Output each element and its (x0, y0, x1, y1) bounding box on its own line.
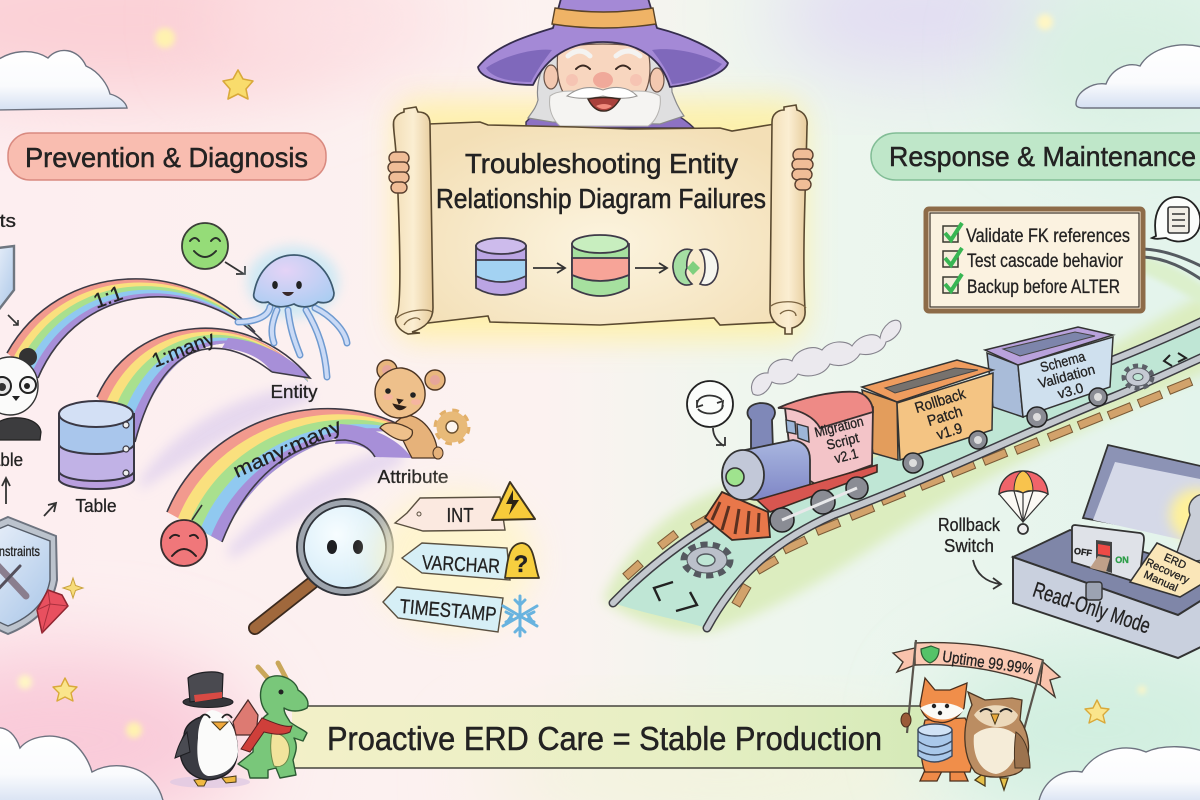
tag: INT: INT (446, 505, 474, 527)
train: carriage Schema Validation (985, 327, 1113, 427)
icon: snowflake (503, 596, 537, 636)
icon: green and red table stack (572, 235, 629, 296)
rollback switch panel (1072, 525, 1144, 583)
tag: VARCHAR: VARCHAR (421, 552, 500, 578)
icon: question mark (505, 543, 539, 578)
track bed (613, 320, 1200, 628)
magnifying glass (255, 499, 393, 628)
green hill under the railway (603, 255, 1200, 633)
check item: Backup before ALTER: Backup before ALTER (967, 277, 1120, 298)
rainbow: many to many relationship (167, 409, 412, 542)
label: Table: Table (76, 496, 116, 516)
cow catcher (705, 492, 770, 540)
icon: ruby (37, 590, 68, 633)
label: Rollback Patch v1.9: v1.9 (935, 420, 964, 444)
cloud: bottom right (1038, 747, 1200, 800)
rainbow: 1 to 1 relationship (7, 279, 262, 378)
recovery manual (1130, 543, 1200, 598)
label: Schema Validation v3.0: Schema (1038, 348, 1087, 375)
arrow: switch label to toolbox (973, 560, 1001, 589)
parchment scroll (388, 105, 813, 334)
label: Rollback Patch v1.9 (913, 385, 977, 448)
left roll (393, 107, 433, 334)
toolbox interior (1013, 530, 1200, 615)
yellow wash behind the tags (375, 490, 535, 630)
icon: gear, attribute (437, 412, 467, 442)
label: Entity: Entity (270, 382, 318, 402)
icon: warning bolt (492, 482, 535, 520)
tag: TIMESTAMP: TIMESTAMP (399, 596, 497, 626)
icon: repaired link (673, 249, 718, 285)
recovery manual: ERD (1162, 552, 1188, 572)
icon: cycle badge (687, 381, 733, 427)
scroll title: Relationship Diagram Failures (436, 183, 766, 214)
train: carriage Rollback Patch (862, 360, 993, 473)
star: bottom right (1085, 700, 1109, 723)
recovery manual: Recovery (1144, 557, 1191, 587)
label: Read-Only Mode: Read-Only Mode (1030, 577, 1154, 638)
arrow: shield to panda (8, 315, 18, 325)
code brackets, left (654, 582, 697, 611)
icon: blue and purple table stack (476, 238, 526, 295)
gear on the track, right (1124, 366, 1152, 388)
left hand (388, 152, 409, 193)
rails (613, 249, 1200, 628)
label: 1:1: 1:1 (91, 282, 126, 313)
scroll title (436, 148, 766, 214)
toolbox (1013, 445, 1200, 658)
wizard ears (544, 65, 664, 92)
green dragon (233, 663, 308, 778)
cloud: top left (0, 50, 127, 110)
rainbow: 1 to many relationship (97, 327, 310, 442)
wheels (770, 477, 868, 532)
code brackets, right (1164, 353, 1186, 366)
fox holding a database (901, 678, 973, 781)
wizard hat (478, 0, 728, 87)
recovery manual: Manual (1142, 569, 1180, 594)
check item: Backup before ALTER (943, 274, 1120, 298)
check item: Test cascade behavior: Test cascade behavior (967, 251, 1124, 272)
arrow: smiley to jellyfish (225, 262, 245, 274)
heading pill: Prevention and Diagnosis: Prevention & Diagnosis (25, 142, 308, 173)
heading pill: Prevention and Diagnosis (8, 133, 326, 180)
cloud: top right (1076, 45, 1200, 108)
shield: entry constraints, top left (0, 211, 16, 315)
label: Attribute: Attribute (378, 467, 448, 487)
rollback switch panel: OFF (1073, 546, 1093, 558)
right roll (770, 105, 807, 334)
label: Migration Script v2.1: v2.1 (833, 445, 860, 466)
icon: green smiley (182, 223, 228, 269)
wizard beard (550, 91, 660, 126)
bottom banner: Proactive ERD Care = Stable Production (327, 720, 882, 757)
wizard robe (526, 104, 694, 128)
right hand (792, 149, 813, 190)
wizard face (557, 44, 650, 98)
label: many:many: many:many (230, 415, 345, 483)
shield: constraints (0, 517, 57, 634)
arrow: first step (533, 263, 565, 273)
uptime ribbon (893, 640, 1060, 733)
star: top left (223, 70, 253, 99)
arrow: shield to table (44, 503, 56, 516)
chimney (748, 403, 775, 450)
wizard eyebrows, eyes, nose, moustache, mouth (566, 51, 642, 111)
railway track (613, 249, 1200, 628)
database: Table (59, 401, 134, 489)
check item: Validate FK references: Validate FK references (966, 226, 1130, 247)
arrow: up to panda (2, 478, 10, 504)
gear on the track, left (684, 545, 730, 575)
icon: speech bubble with note (1152, 197, 1200, 242)
scroll title: Troubleshooting Entity (465, 148, 738, 179)
owl (965, 692, 1030, 790)
wizard (478, 0, 728, 128)
sleepers (623, 378, 1193, 607)
penguin with top hat (170, 672, 250, 788)
icon: sparkle (63, 578, 83, 598)
check item: Test cascade behavior (943, 248, 1124, 272)
label: Schema Validation v3.0: v3.0 (1056, 379, 1085, 402)
icon: question mark: ? (514, 551, 528, 578)
label: Rollback Switch (938, 515, 1001, 556)
label: Schema Validation v3.0: Validation (1036, 361, 1097, 391)
tag: TIMESTAMP (383, 587, 503, 632)
teddy bear (375, 360, 445, 459)
label: Rollback Switch: Switch (944, 536, 994, 556)
cloud: bottom left (0, 728, 164, 800)
icon: red sad face (161, 505, 207, 566)
check item: Validate FK references (943, 223, 1130, 247)
cab (785, 392, 873, 485)
bottom banner (292, 706, 924, 768)
tag: INT (395, 497, 505, 531)
footplate (757, 465, 877, 512)
panda (0, 348, 41, 440)
heading pill: Response and Maintenance (871, 133, 1200, 180)
label: Migration Script v2.1: Script (825, 429, 861, 453)
icon: parachute (999, 471, 1048, 534)
label: Schema Validation v3.0 (1033, 346, 1100, 406)
wizard hair (528, 44, 684, 124)
toolbox lid (1083, 445, 1200, 540)
label: 1:many: 1:many (149, 327, 218, 372)
glow behind wrench (1170, 489, 1200, 541)
rollback switch panel: ON (1115, 555, 1129, 565)
label: Migration Script v2.1 (813, 413, 872, 469)
label: Rollback Patch v1.9: Patch (925, 403, 965, 430)
tag: VARCHAR (402, 543, 510, 580)
rainbow shadows (140, 385, 405, 560)
label: Rollback Switch: Rollback (938, 515, 1001, 535)
scroll sheet (428, 122, 780, 325)
label: Migration Script v2.1: Migration (813, 413, 865, 440)
toolbox front (1013, 557, 1200, 658)
train smoke (751, 320, 901, 395)
arrow: second step (635, 263, 667, 273)
star: bottom left (53, 678, 77, 701)
checklist board (926, 209, 1143, 311)
train: locomotive (705, 392, 877, 540)
label: Rollback Patch v1.9: Rollback (913, 385, 968, 417)
right roll curl (771, 302, 806, 316)
boiler (729, 440, 810, 500)
wrench (1176, 494, 1200, 562)
scroll glow (395, 100, 805, 340)
arrow: cycle to train (713, 428, 725, 446)
left roll curl (397, 310, 432, 325)
uptime ribbon: Uptime 99.99% (941, 649, 1035, 678)
jellyfish (238, 246, 347, 377)
